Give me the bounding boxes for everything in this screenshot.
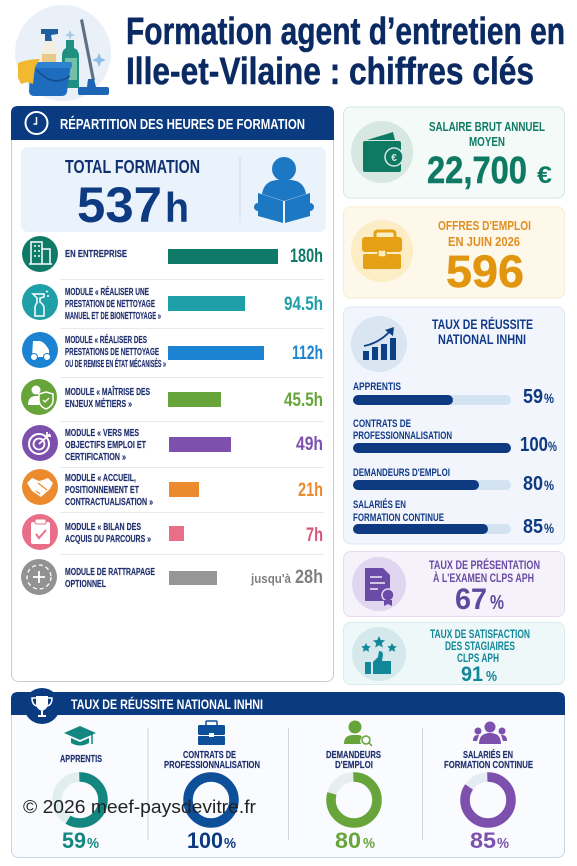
bar: contrats de professionnalisation: % <box>548 438 557 454</box>
row: accueil: MODULE « ACCUEIL, <box>65 473 136 484</box>
copyright: © 2026 meef-paysdevitre.fr <box>23 797 256 817</box>
icon: wallet <box>363 132 403 172</box>
row: accueil: POSITIONNEMENT ET <box>65 485 139 496</box>
ring: contrats de professionnalisation: CONTRATS DE <box>183 750 236 761</box>
row: enjeux métiers <box>21 377 324 415</box>
row: objectifs emploi <box>22 421 324 463</box>
panel header: RÉPARTITION DES HEURES DE FORMATION <box>60 116 305 133</box>
row: nettoyage manuel: MODULE « RÉALISER UNE <box>65 285 149 298</box>
row: rattrapage: OPTIONNEL <box>65 579 106 590</box>
card: taux de présentation <box>344 552 564 616</box>
card: taux de satisfaction: CLPS APH <box>457 653 499 665</box>
total formation box: 537 <box>77 177 162 233</box>
card: taux de réussite national (barres): NATIONAL INHNI <box>438 332 526 347</box>
card: taux de satisfaction: % <box>486 668 497 685</box>
row: en entreprise: EN ENTREPRISE <box>65 249 127 260</box>
row: rattrapage: MODULE DE RATTRAPAGE <box>65 567 155 578</box>
panel header <box>11 106 334 140</box>
total formation box: TOTAL FORMATION <box>65 157 200 177</box>
ring: contrats de professionnalisation: PROFESSIONNALISATION <box>164 760 260 771</box>
total formation box <box>21 147 326 233</box>
panel: taux de réussite national (anneaux) <box>11 688 565 858</box>
card: offres d'emploi <box>344 207 564 298</box>
row: objectifs emploi: MODULE « VERS MES <box>65 428 139 439</box>
row: nettoyage mécanisé: 112h <box>292 343 323 364</box>
panel: répartition des heures de formation <box>11 106 334 682</box>
row: nettoyage mécanisé <box>22 328 324 370</box>
bar: salariés en formation continue: FORMATION CONTINUE <box>353 512 444 524</box>
panel header <box>11 688 565 724</box>
ring: demandeurs d'emploi: DEMANDEURS <box>326 750 381 761</box>
row: objectifs emploi: OBJECTIFS EMPLOI ET <box>65 440 146 451</box>
row: bilan: ACQUIS DU PARCOURS » <box>65 534 151 545</box>
bar: salariés en formation continue: SALARIÉS EN <box>353 498 406 511</box>
bar: salariés en formation continue: % <box>544 520 554 536</box>
row: nettoyage manuel: PRESTATION DE NETTOYAGE <box>65 299 155 310</box>
title <box>126 11 565 93</box>
bar: demandeurs d'emploi: % <box>544 477 554 493</box>
card: salaire brut annuel moyen: 22,700 <box>427 150 527 192</box>
panel header: TAUX DE RÉUSSITE NATIONAL INHNI <box>71 696 263 712</box>
bar: contrats de professionnalisation: CONTRATS DE <box>353 418 411 430</box>
total formation box: h <box>165 184 189 231</box>
icon: thumbs up with stars <box>361 636 397 674</box>
ring: salariés en formation continue: SALARIÉS EN <box>463 748 513 761</box>
icon: cleaning products <box>15 5 111 101</box>
ring: apprentis: APPRENTIS <box>60 754 102 765</box>
ring: salariés en formation continue: FORMATION CONTINUE <box>444 760 533 771</box>
icon: briefcase <box>362 231 402 269</box>
row: bilan <box>22 512 324 550</box>
card: offres d'emploi: OFFRES D'EMPLOI <box>438 218 531 233</box>
row: rattrapage: jusqu'à <box>250 571 292 586</box>
row: objectifs emploi: CERTIFICATION » <box>65 452 126 463</box>
bar: contrats de professionnalisation <box>353 418 557 456</box>
card: salaire brut annuel moyen <box>344 107 564 198</box>
card: taux de présentation: À L'EXAMEN CLPS APH <box>433 570 534 585</box>
bar: apprentis: APPRENTIS <box>353 381 401 393</box>
row: en entreprise <box>22 236 323 272</box>
bar: apprentis: 59 <box>523 386 543 408</box>
row: accueil: 21h <box>298 480 323 501</box>
ring: salariés en formation continue: % <box>497 835 509 852</box>
ring: demandeurs d'emploi: % <box>363 835 375 852</box>
row: enjeux métiers: 45.5h <box>284 390 323 411</box>
card: taux de satisfaction <box>344 622 564 686</box>
icon: reader with book <box>254 157 314 223</box>
bar: demandeurs d'emploi <box>353 467 554 495</box>
row: objectifs emploi: 49h <box>296 434 323 455</box>
card: taux de réussite national (barres) <box>344 307 564 544</box>
ring: apprentis: % <box>87 835 99 852</box>
bar: demandeurs d'emploi: DEMANDEURS D'EMPLOI <box>353 467 450 479</box>
bar: contrats de professionnalisation: PROFESSIONNALISATION <box>353 430 452 442</box>
row: nettoyage mécanisé: OU DE REMISE EN ÉTAT MÉCANISÉS » <box>65 357 166 370</box>
icon: wallet: € <box>391 153 397 164</box>
icon: certificate document <box>365 568 394 606</box>
card: salaire brut annuel moyen: € <box>537 162 552 189</box>
bar: contrats de professionnalisation: 100 <box>520 434 548 456</box>
card: taux de présentation: 67 <box>455 583 487 616</box>
card: taux de présentation: % <box>490 592 504 614</box>
ring: contrats de professionnalisation: % <box>224 835 236 852</box>
bar: salariés en formation continue: 85 <box>523 516 543 538</box>
row: nettoyage mécanisé: PRESTATIONS DE NETTOYAGE <box>65 347 159 358</box>
icon: rising chart <box>363 327 396 360</box>
ring: salariés en formation continue <box>444 722 533 853</box>
bar: apprentis: % <box>544 390 554 406</box>
row: enjeux métiers: MODULE « MAÎTRISE DES <box>65 385 150 398</box>
ring: contrats de professionnalisation <box>164 721 260 853</box>
row: rattrapage: 28h <box>295 567 323 588</box>
card: taux de satisfaction: 91 <box>461 663 483 686</box>
row: accueil: CONTRACTUALISATION » <box>65 497 153 508</box>
row: nettoyage mécanisé: MODULE « RÉALISER DES <box>65 333 147 346</box>
ring: apprentis: 59 <box>62 828 86 853</box>
row: bilan: MODULE « BILAN DES <box>65 522 141 533</box>
ring: demandeurs d'emploi: D'EMPLOI <box>335 760 373 771</box>
row: en entreprise: 180h <box>290 246 323 267</box>
row: nettoyage manuel <box>22 279 324 322</box>
row: accueil <box>22 467 324 508</box>
card: taux de satisfaction: DES STAGIAIRES <box>445 641 515 653</box>
ring: salariés en formation continue: 85 <box>470 828 496 853</box>
row: nettoyage manuel: MANUEL ET DE BIONETTOYAGE » <box>65 311 161 322</box>
card: salaire brut annuel moyen: MOYEN <box>469 134 505 149</box>
card: offres d'emploi: EN JUIN 2026 <box>448 234 520 249</box>
card: taux de satisfaction: TAUX DE SATISFACTION <box>430 629 530 641</box>
row: enjeux métiers: ENJEUX MÉTIERS » <box>65 397 132 410</box>
ring: demandeurs d'emploi: 80 <box>335 828 361 853</box>
bar: apprentis <box>353 381 554 408</box>
card: taux de réussite national (barres): TAUX DE RÉUSSITE <box>432 317 533 332</box>
row: nettoyage manuel: 94.5h <box>284 294 323 315</box>
row: bilan: 7h <box>306 525 323 546</box>
card: taux de présentation: TAUX DE PRÉSENTATION <box>429 557 540 572</box>
row: rattrapage <box>21 554 324 595</box>
ring: demandeurs d'emploi <box>326 720 381 853</box>
bar: salariés en formation continue <box>353 498 554 538</box>
ring: apprentis <box>57 726 103 853</box>
ring: contrats de professionnalisation: 100 <box>187 828 223 853</box>
bar: demandeurs d'emploi: 80 <box>523 473 543 495</box>
card: offres d'emploi: 596 <box>446 246 524 297</box>
